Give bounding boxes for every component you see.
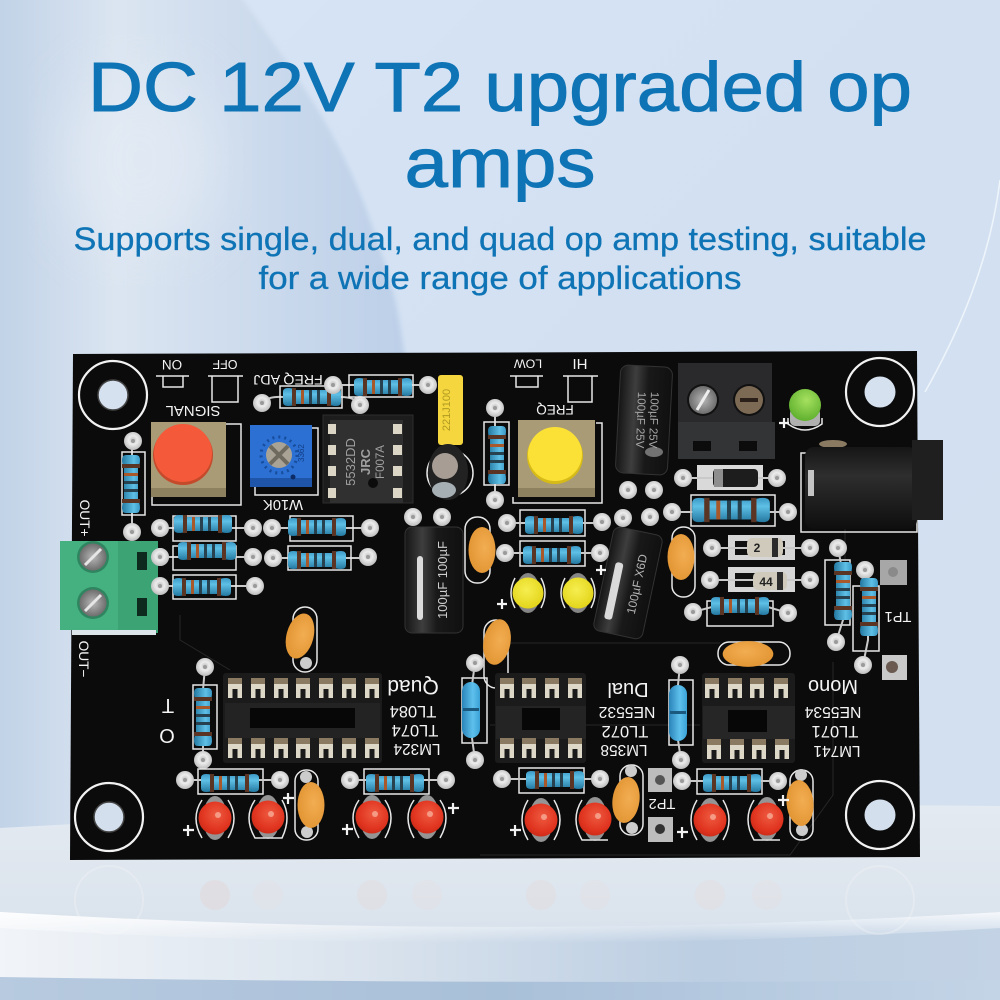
silkscreen labels <box>76 355 911 811</box>
green output terminal block <box>60 541 169 635</box>
ceramic capacitors <box>281 517 815 840</box>
silkscreen labels: LM324 <box>393 740 441 757</box>
diode D2 <box>703 535 819 560</box>
diode D3 <box>701 567 819 592</box>
resistor rows: left <box>151 515 379 599</box>
title: DC 12V T2 upgraded op <box>88 48 912 126</box>
silkscreen labels: LOW <box>514 356 542 370</box>
silkscreen labels: TL074 <box>392 721 438 739</box>
silkscreen labels: NE5532 <box>599 703 655 720</box>
silkscreen labels: Mono <box>808 675 858 697</box>
silkscreen labels: FREQ ADJ <box>253 371 323 387</box>
electrolytic capacitor 100uF top: 100µF 25V <box>633 392 647 449</box>
silkscreen labels: T <box>162 694 174 716</box>
resistors group: upper left <box>122 375 509 541</box>
title <box>88 48 912 202</box>
subtitle <box>74 221 926 296</box>
silkscreen labels: OFF <box>212 357 238 371</box>
op amp IC in socket: 5532DD <box>343 438 358 486</box>
subtitle: Supports single, dual, and quad op amp testing, suitable <box>74 221 926 257</box>
silkscreen labels: LM358 <box>600 741 648 758</box>
board reflection <box>75 866 914 934</box>
silkscreen labels: TL072 <box>602 722 648 740</box>
mounting holes <box>75 358 914 851</box>
silkscreen labels: TL084 <box>390 702 436 720</box>
silkscreen labels: OUT− <box>76 641 91 677</box>
film capacitor 221J100: 221J100 <box>441 389 453 431</box>
silkscreen labels: TP2 <box>649 795 675 811</box>
test points <box>648 560 907 842</box>
trimmer potentiometer: 3362 <box>297 444 306 462</box>
silkscreen labels: Quad <box>387 675 439 698</box>
yellow LEDs <box>497 565 606 613</box>
silkscreen labels: LM741 <box>813 742 861 759</box>
op amp IC in socket: JRC <box>358 448 373 475</box>
silkscreen labels: HI <box>572 355 588 372</box>
socket resistors <box>193 654 693 769</box>
IC socket: Mono <box>702 673 795 763</box>
op amp IC in socket: F007A <box>375 445 387 479</box>
small electrolytic capacitor <box>427 444 473 500</box>
silkscreen labels: SIGNAL <box>165 402 221 419</box>
red LEDs <box>183 793 789 842</box>
silkscreen labels: NE5534 <box>804 703 861 720</box>
electrolytic capacitor 100uF left: 100µF 100µF <box>435 541 450 619</box>
silkscreen labels: W10K <box>263 496 303 512</box>
black power terminal block <box>678 363 775 459</box>
diode D3: 44 <box>759 575 773 589</box>
large power resistor <box>663 495 797 526</box>
electrolytic capacitor 100uF center <box>593 508 663 640</box>
DC barrel jack <box>801 440 943 532</box>
trimmer potentiometer <box>250 425 312 487</box>
silkscreen labels: TL071 <box>812 722 858 740</box>
IC socket: Dual <box>495 673 586 763</box>
subtitle: for a wide range of applications <box>258 260 742 296</box>
diode D2: 2 <box>754 541 761 555</box>
IC socket: Quad <box>223 673 382 763</box>
switch: FREQ yellow button <box>518 420 595 497</box>
electrolytic capacitor 100uF top <box>615 365 673 499</box>
switch footprints <box>152 376 602 505</box>
board base <box>70 351 920 860</box>
circuit board <box>60 351 943 860</box>
op amp IC in socket <box>323 415 413 503</box>
switch: SIGNAL red button <box>151 422 226 497</box>
silkscreen labels: OUT+ <box>77 500 92 536</box>
silkscreen labels: FREQ <box>536 402 574 417</box>
silkscreen labels: TP1 <box>885 608 911 624</box>
silkscreen labels: ON <box>162 357 182 372</box>
diode D1 <box>674 465 786 490</box>
electrolytic capacitor 100uF top: 100µF 25V <box>646 392 660 449</box>
silkscreen labels: O <box>159 724 175 746</box>
silkscreen labels: Dual <box>607 678 649 700</box>
green power LED <box>779 389 822 430</box>
bottom resistors <box>176 768 787 794</box>
electrolytic capacitor 100uF left <box>404 508 463 633</box>
electrolytic capacitor 100uF center: 100µF X6D <box>624 553 650 615</box>
resistors group: right and center <box>496 510 879 674</box>
film capacitor 221J100 <box>438 375 463 445</box>
title: amps <box>404 124 596 202</box>
